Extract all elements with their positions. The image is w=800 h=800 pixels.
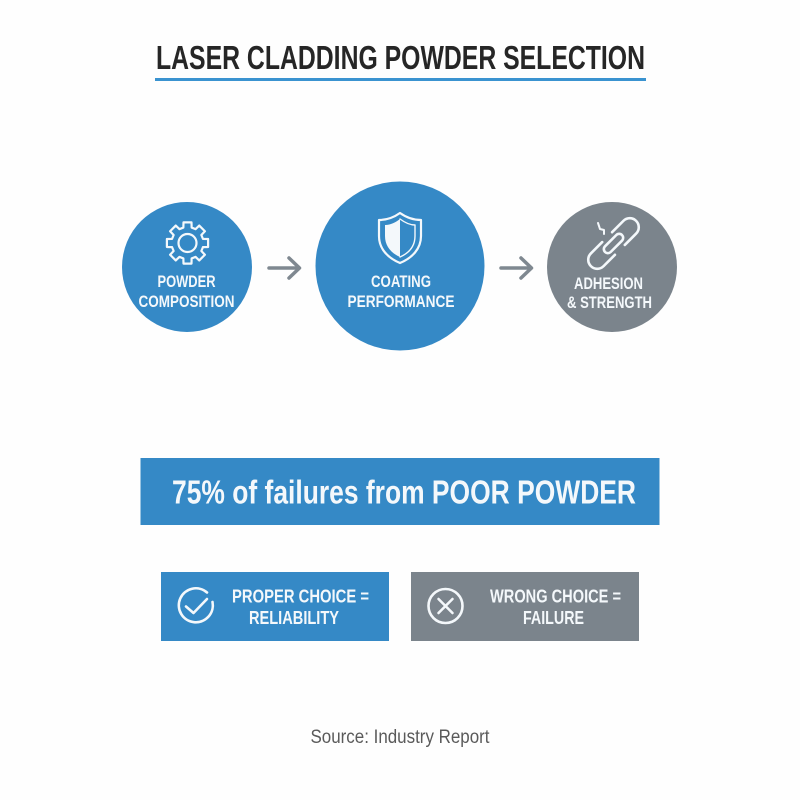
label: powder composition: POWDER — [158, 273, 216, 291]
label: powder composition — [138, 273, 234, 311]
label: adhesion and strength — [567, 275, 652, 312]
label: adhesion and strength: ADHESION — [574, 275, 643, 293]
title — [155, 39, 646, 81]
label: proper choice equals reliability: PROPER CHOICE = — [232, 586, 369, 606]
icon: x circle — [428, 589, 462, 623]
icon: gear — [167, 222, 208, 264]
panel: wrong choice — [411, 572, 639, 641]
icon: check circle — [179, 588, 213, 622]
label: coating performance: PERFORMANCE — [348, 293, 454, 311]
label: wrong choice equals failure: WRONG CHOICE = — [490, 586, 621, 606]
label: coating performance: COATING — [371, 273, 431, 291]
label: coating performance — [348, 273, 454, 311]
label: wrong choice equals failure — [490, 586, 621, 628]
arrow: performance to adhesion — [501, 258, 532, 278]
panel: adhesion and strength circle — [547, 202, 677, 332]
panel: powder composition circle — [122, 202, 252, 332]
title: LASER CLADDING POWDER SELECTION — [156, 39, 645, 76]
label: adhesion and strength: & STRENGTH — [567, 294, 652, 312]
callout: 75 percent of failures banner — [140, 458, 660, 525]
icon: shield — [379, 213, 421, 263]
panel: proper choice — [161, 572, 389, 641]
panel: coating performance circle — [316, 182, 484, 350]
label: wrong choice equals failure: FAILURE — [523, 607, 584, 628]
source note: Source: Industry Report — [310, 727, 490, 748]
arrow: composition to performance — [269, 258, 300, 278]
label: proper choice equals reliability: RELIABILITY — [249, 607, 340, 628]
callout: 75 percent of failures banner: 75% of failures from POOR POWDER — [172, 474, 636, 510]
icon: chain link — [585, 215, 642, 272]
label: powder composition: COMPOSITION — [138, 293, 234, 311]
label: proper choice equals reliability — [232, 586, 369, 628]
